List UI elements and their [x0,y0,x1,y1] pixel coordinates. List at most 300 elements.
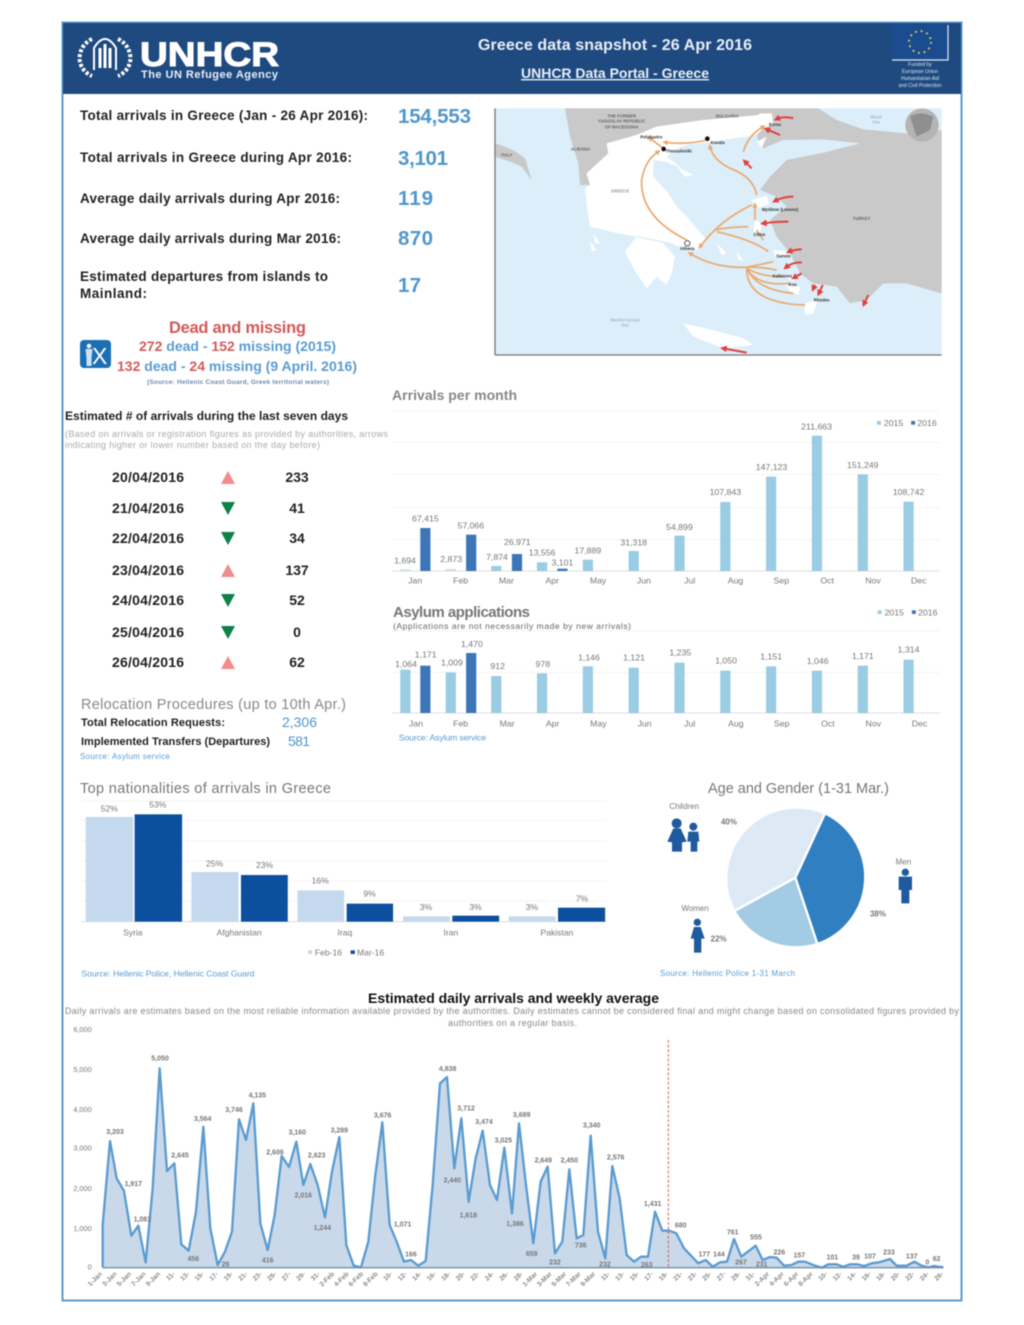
value labels: 3,160 [289,1129,306,1136]
age and gender chart [660,781,912,978]
map labels: Sea [621,323,629,328]
month labels: Sep [774,576,789,586]
percent labels: 23% [256,861,274,870]
month labels: Dec [911,576,927,586]
table rows: 34 [289,530,305,546]
icon: EU flag [892,25,948,60]
value labels: 456 [188,1256,199,1263]
value labels: 147,123 [756,462,788,472]
value labels: 144 [713,1251,725,1258]
date axis labels: 31- [310,1271,322,1283]
date axis labels: 6-Feb [348,1271,365,1288]
month labels: Feb [453,576,469,586]
value labels: 1,009 [441,658,463,668]
date axis labels: 8-Apr [797,1271,815,1288]
icon: children [667,818,699,852]
legend: 2016 [917,418,937,428]
pie labels: 22% [711,935,727,944]
percent labels: 7% [576,895,589,904]
y axis labels: 0 [88,1262,92,1271]
value labels: 1,171 [852,651,874,661]
date axis labels: 29- [730,1271,742,1283]
percent labels: 9% [363,890,376,899]
EU funding note: Humanitarian Aid [901,76,939,82]
neighbouring land [495,143,532,180]
country labels: Pakistan [541,929,574,937]
value labels: 211,663 [801,422,832,431]
date axis labels: 7-Mar [565,1271,583,1288]
relocation procedures: Source: Asylum service [80,752,171,761]
map labels: Mediterranean [610,318,640,323]
map labels: TURKEY [853,216,871,221]
table rows: 25/04/2016 [112,624,184,640]
value labels: 267 [735,1259,747,1266]
date axis labels: 14- [846,1271,858,1283]
value labels: 1,470 [461,639,483,649]
value labels: 1,146 [578,653,600,663]
date axis labels: 21- [237,1271,249,1283]
date axis labels: 12- [397,1271,409,1283]
value labels: 2,440 [444,1177,461,1184]
dead and missing block: Dead and missing [169,319,306,337]
date axis labels: 4-Apr [768,1271,786,1288]
map labels: Kavala [711,140,725,145]
legend: 2016 [918,608,938,617]
date axis labels: 6-Apr [783,1271,800,1288]
value labels: 912 [490,661,505,671]
dead and missing block: (Source: Hellenic Coast Guard, Greek territorial waters) [147,379,329,386]
value labels: 232 [549,1259,561,1266]
table rows: 24/04/2016 [112,592,184,608]
map labels: Polykastro [640,135,663,140]
value labels: 1,050 [715,656,737,666]
table rows: 23/04/2016 [112,562,184,578]
map labels: Mytilene (Lesvos) [762,207,799,212]
date axis labels: 2-Apr [754,1271,771,1288]
value labels: 0 [925,1259,929,1266]
map frame [495,108,942,355]
country labels: Afghanistan [217,929,262,937]
date axis labels: 18- [875,1271,887,1283]
2015 bars [400,660,914,713]
legend: 2015 [885,608,904,617]
Greek islands [590,137,818,348]
y axis labels: 2,000 [73,1184,92,1193]
value labels [395,639,920,671]
pie [726,808,865,947]
value labels: 1,314 [898,645,920,654]
value labels: 3,474 [475,1119,493,1126]
stat: March daily average: 870 [398,227,433,250]
date axis labels: 23- [687,1271,699,1283]
date axis labels: 13- [614,1271,626,1283]
value labels: 1,244 [314,1225,331,1232]
value labels: 416 [262,1258,274,1265]
table rows: 26/04/2016 [112,654,184,670]
legend: Feb-16 [315,949,342,957]
value labels: 555 [750,1235,762,1242]
value labels: 1,046 [807,656,829,666]
value labels: 1,121 [623,653,645,663]
date axis labels [87,1271,945,1288]
value labels: 67,415 [412,514,439,524]
header band [63,23,961,94]
date axis labels: 23- [252,1271,264,1283]
table rows [112,469,309,670]
value labels: 1,431 [644,1201,662,1208]
country labels: Syria [123,929,143,937]
y axis labels: 4,000 [73,1105,92,1114]
date axis labels: 12- [832,1271,844,1283]
table rows: 62 [289,654,305,670]
value labels: 13,556 [529,548,556,557]
value labels [106,1055,941,1269]
map labels [501,113,882,328]
value labels: 2,873 [440,554,462,564]
value labels: 1,386 [506,1221,524,1228]
date axis labels: 24- [919,1271,931,1283]
value labels: 231 [756,1261,768,1268]
date axis labels: 7-Jan [130,1271,148,1288]
percent labels: 3% [469,903,482,912]
date axis labels: 28- [513,1271,525,1283]
date axis labels: 15- [194,1271,206,1283]
value labels: 659 [526,1251,538,1258]
value labels: 31,318 [620,538,647,547]
pie labels [669,802,911,944]
date axis labels: 5-Mar [551,1271,568,1288]
value labels: 26 [222,1262,230,1269]
trend arrows [221,471,235,669]
stat: March daily average [80,227,433,250]
map labels: YUGOSLAV REPUBLIC [598,119,645,124]
map labels: THE FORMER [607,113,637,118]
value labels: 3,712 [457,1106,475,1113]
last seven days panel: indicating higher or lower number based on the day before) [65,440,320,450]
value labels: 2,576 [607,1154,625,1161]
value labels: 978 [536,659,550,669]
value labels: 3,340 [583,1123,601,1130]
stat: April arrivals [80,147,448,170]
map labels: BULGARIA [716,114,740,119]
country labels: Iran [444,929,459,937]
date axis labels: 16- [426,1271,438,1283]
EU funding note: Funded by [908,62,932,68]
date axis labels: 19- [658,1271,670,1283]
percent labels: 25% [206,860,224,868]
value labels: 57,066 [457,521,484,530]
date axis labels: 4-Feb [333,1271,351,1288]
date axis labels: 19- [223,1271,235,1283]
month labels: Mar [499,576,514,586]
value labels: 1,235 [669,648,692,658]
value labels: 166 [405,1251,417,1258]
month labels: Apr [546,719,560,728]
value labels: 108,742 [893,487,925,497]
date axis labels: 10- [382,1271,394,1283]
month labels: Jun [637,576,651,586]
stat: April daily average: Average daily arrivals during Apr 2016: [80,191,340,206]
daily arrivals chart: authorities on a regular basis. [448,1018,577,1028]
arrivals per month chart [392,387,939,586]
area series [103,1068,943,1268]
date axis labels: 3-Jan [101,1271,119,1288]
relocation procedures: 581 [288,733,310,749]
stat: departures to mainland: 17 [398,274,421,297]
value labels: 101 [826,1255,838,1262]
date axis labels: 26- [933,1271,945,1283]
EU funding note [898,62,942,89]
country labels [123,929,574,937]
date axis labels: 2-Feb [319,1271,336,1288]
stat: April daily average [80,187,433,210]
2016 bars [420,528,568,571]
table rows: 20/04/2016 [112,469,184,485]
date axis labels: 21- [672,1271,684,1283]
value labels: 3,746 [225,1107,243,1114]
percent labels: 52% [101,805,118,814]
EU funding note: and Civil Protection [898,83,942,89]
percent labels [101,801,589,912]
legend: 2015 [884,418,904,428]
icon: man [899,869,912,903]
month labels: May [590,576,607,586]
value labels: 62 [933,1256,941,1263]
note: (Based on arrivals or registration figures as provided by authorities, arrows [65,429,388,439]
value labels: 1,171 [415,650,437,659]
date axis labels: 31- [745,1271,757,1283]
date axis labels: 17- [208,1271,220,1283]
percent labels: 16% [312,877,329,885]
value labels: 680 [675,1223,687,1230]
gridlines [392,411,939,540]
date axis labels: 14- [411,1271,423,1283]
y axis labels: 3,000 [73,1144,92,1153]
heading: Estimated # of arrivals during the last seven days [65,409,348,423]
date axis labels: 27- [281,1271,293,1283]
stat: March daily average: Average daily arrivals during Mar 2016: [80,231,341,246]
Feb-16 bars [86,817,556,922]
map labels: GREECE [611,189,629,194]
value labels: 26,971 [504,537,531,547]
value labels: 107,843 [710,487,741,497]
legend [308,949,385,957]
month labels: Jul [684,576,695,586]
icon: dead and missing: X [92,343,107,369]
map labels: Sea [872,119,880,124]
value labels: 3,025 [495,1138,512,1145]
value labels: 7,874 [486,552,508,562]
date axis labels: 20- [455,1271,467,1283]
value labels: 3,676 [374,1112,392,1119]
stat: total arrivals [80,105,471,128]
value labels: 1,081 [134,1216,151,1223]
daily arrivals chart [65,990,959,1288]
month labels: Dec [912,719,927,728]
value labels: 1,064 [395,659,417,669]
last seven days panel [65,409,388,670]
pie labels: Women [681,904,709,913]
date axis labels: 29- [295,1271,307,1283]
date axis labels: 27- [716,1271,728,1283]
date axis labels: 15- [629,1271,641,1283]
y axis labels: 5,000 [73,1065,92,1074]
top nationalities chart [80,781,606,979]
sea [495,108,942,355]
value labels: 3,564 [194,1116,212,1123]
map labels: Athens [680,246,695,251]
date axis labels: 5-Jan [116,1271,133,1288]
map of routes [495,108,942,355]
value labels: 1,151 [760,652,782,661]
map labels: Kos [789,282,797,287]
value labels: 2,450 [561,1158,578,1165]
data portal link: UNHCR Data Portal - Greece [521,65,709,81]
date axis labels: 11- [600,1271,612,1282]
month labels [408,576,927,586]
title: Greece data snapshot - 26 Apr 2016 [478,37,752,54]
month labels: Aug [728,719,744,728]
value labels: 232 [599,1261,611,1268]
date axis labels: 10- [817,1271,829,1283]
country labels: Iraq [338,929,353,937]
stat: departures to mainland: Estimated departures from islands to [80,269,328,284]
month labels: Sep [774,719,790,728]
relocation procedures: Implemented Transfers (Departures) [81,736,270,748]
heading: Arrivals per month [392,387,517,403]
icon: dead and missing [80,340,111,369]
value labels: 1,917 [125,1181,142,1188]
dead and missing block: 132 dead - 24 missing (9 April. 2016) [117,358,357,374]
dead and missing block: 272 dead - 152 missing (2015) [139,338,336,354]
table rows: 21/04/2016 [112,500,184,516]
value labels [394,422,925,567]
value labels: 1,618 [460,1213,477,1220]
value labels: 137 [906,1253,918,1260]
table rows: 41 [289,500,305,516]
date axis labels: 1-Jan [87,1271,104,1288]
icon: UNHCR logo wreath [80,39,130,76]
value labels: 761 [727,1229,739,1236]
date axis labels: 9-Jan [145,1271,162,1288]
percent labels: 53% [149,801,167,810]
Greece mainland [585,113,773,288]
table rows: 22/04/2016 [112,530,184,546]
value labels: 1,694 [394,556,416,565]
date axis labels: 26- [498,1271,510,1283]
month labels: Nov [866,719,882,728]
date axis labels: 20- [890,1271,902,1283]
date axis labels: 9-Mar [580,1271,597,1288]
stat: departures to mainland: Mainland: [80,286,147,301]
map labels: Chios [753,232,766,237]
relocation procedures: Total Relocation Requests: [81,717,225,729]
value labels: 177 [698,1251,710,1258]
date axis labels: 11- [165,1271,177,1282]
value labels: 2,623 [308,1153,326,1160]
value labels: 3,203 [106,1129,124,1136]
percent labels: 3% [526,903,539,912]
value labels: 157 [793,1253,805,1260]
pie labels: Children [669,802,699,811]
map labels: Kalimnos [773,274,793,279]
month labels: Apr [545,576,559,586]
stat: April daily average: 119 [398,187,433,210]
stat: April arrivals: Total arrivals in Greece during Apr 2016: [80,150,352,165]
value labels: 54,899 [666,522,693,532]
value labels: 17,889 [575,546,602,556]
stat: departures to mainland [80,269,421,301]
red dashed reference line [667,1040,670,1268]
note: Daily arrivals are estimates based on the most reliable information available provided by the authorities. Daily estimates cannot be considered final and might change based on consolidated figures provided by [65,1006,959,1016]
red arrival arrows [723,117,868,353]
Mar-16 bars [135,814,605,922]
relocation procedures: 2,306 [282,714,317,730]
logo tagline: The UN Refugee Agency [141,69,279,81]
value labels: 107 [864,1253,876,1260]
date axis labels: 3-Mar [536,1271,554,1288]
value labels: 233 [883,1249,895,1256]
map labels: Black [870,114,882,119]
date axis labels: 8-Feb [362,1271,380,1288]
value labels: 2,645 [171,1153,189,1160]
source: Source: Asylum service [399,733,486,743]
month labels: Jul [684,719,695,728]
date axis labels: 22- [469,1271,481,1283]
relocation procedures: Relocation Procedures (up to 10th Apr.) [81,697,346,713]
date axis labels: 24- [484,1271,496,1283]
subheading: (Applications are not necessarily made by new arrivals) [393,621,631,631]
stat: total arrivals: Total arrivals in Greece (Jan - 26 Apr 2016): [80,108,368,123]
source: Source: Hellenic Police, Hellenic Coast Guard [81,970,255,979]
date axis labels: 13- [179,1271,191,1283]
month labels: Feb [453,719,469,728]
relocation procedures [80,697,346,761]
date axis labels: 25- [266,1271,278,1283]
globe inset [905,108,939,142]
legend: Mar-16 [357,949,385,957]
pie labels: 40% [721,817,737,826]
value labels: 2,606 [266,1149,284,1156]
2015 bars [400,436,914,571]
table rows: 0 [293,624,301,640]
logo wordmark: UNHCR [140,36,279,74]
pie labels: Men [896,857,911,866]
month labels: Jan [409,719,423,728]
table rows: 52 [289,592,305,608]
legend [878,608,938,617]
table rows: 137 [285,562,309,578]
map labels: Rhodes [814,298,830,303]
value labels: 3,689 [513,1112,531,1119]
orange route arrows [642,127,805,305]
value labels: 39 [852,1254,860,1261]
source: Source: Hellenic Police 1-31 March [660,969,795,978]
legend [877,418,937,428]
table rows: 233 [285,469,309,485]
heading: Top nationalities of arrivals in Greece [80,781,331,797]
value labels: 263 [641,1262,653,1269]
stat: total arrivals: 154,553 [398,105,471,128]
stat: April arrivals: 3,101 [398,147,448,170]
month labels [409,719,927,728]
y axis labels: 6,000 [73,1025,92,1034]
map labels: ALBANIA [571,147,591,152]
month labels: Oct [821,719,835,728]
month labels: Nov [865,576,882,586]
EU funding note: European Union [902,69,938,75]
heading: Asylum applications [393,604,530,621]
